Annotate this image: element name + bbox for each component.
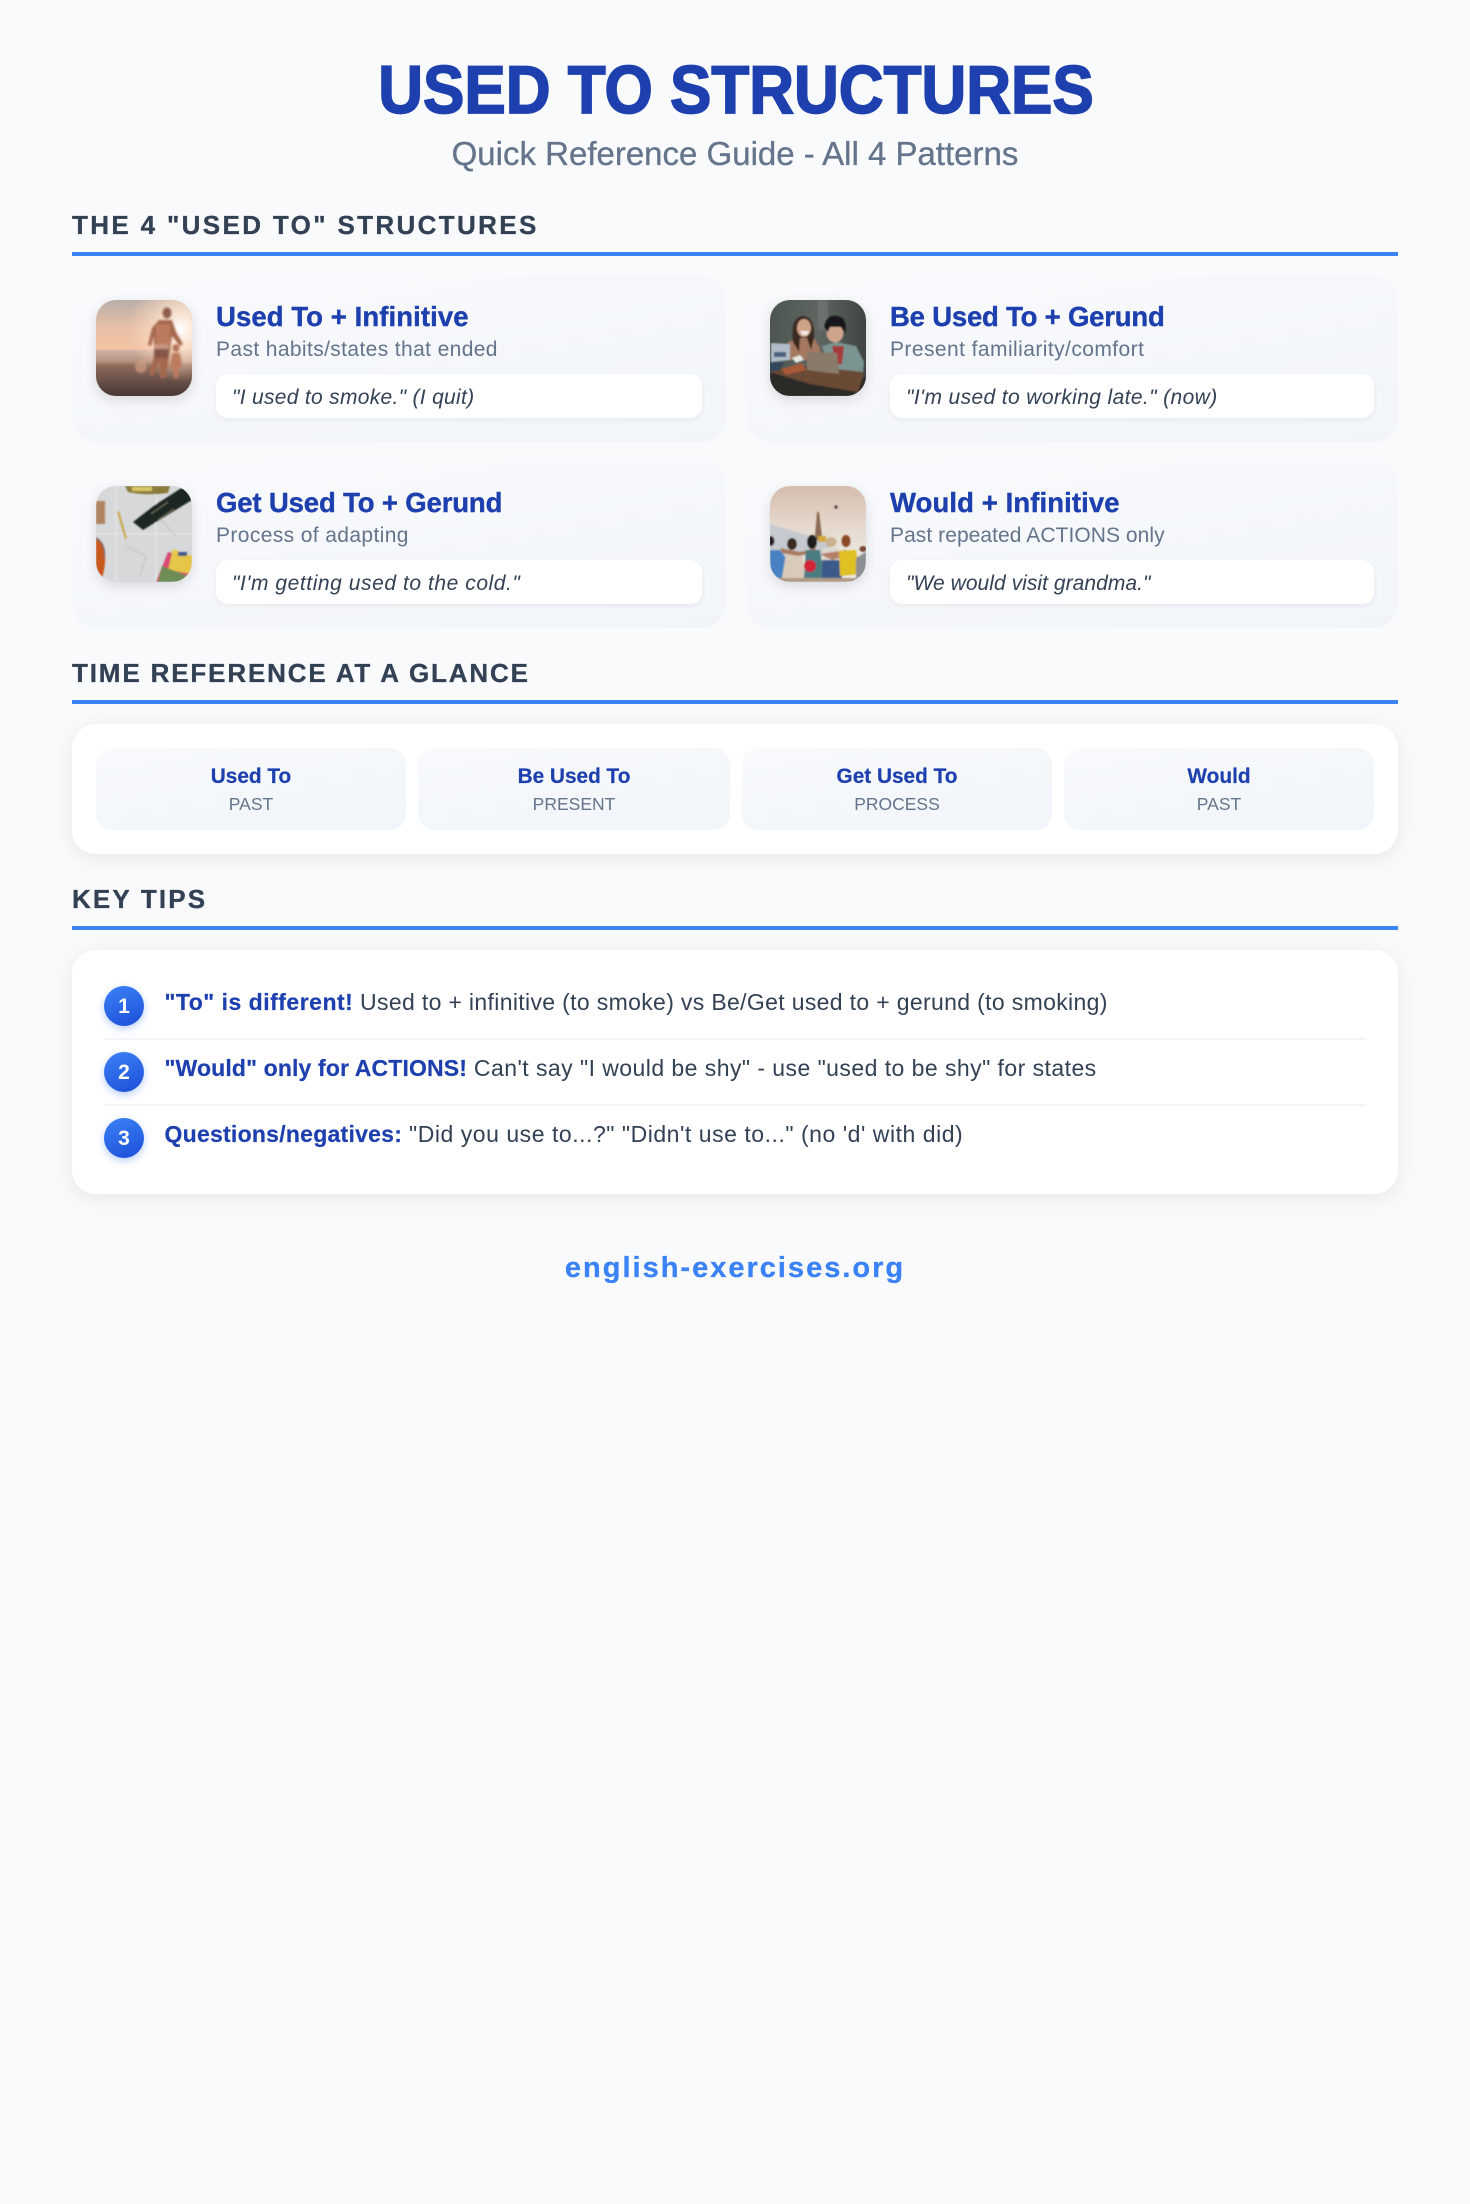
cell label: Get Used To <box>837 765 957 788</box>
subtitle: Quick Reference Guide - All 4 Patterns <box>452 135 1018 172</box>
example sentence <box>890 560 1374 604</box>
cell time: PAST <box>229 794 273 814</box>
cell time: PROCESS <box>854 794 940 814</box>
card description: Past habits/states that ended <box>216 338 498 361</box>
panel: time reference <box>72 724 1398 854</box>
cell label: Used To <box>211 765 291 788</box>
card title: Would + Infinitive <box>890 487 1120 518</box>
icon: photo of father and child on a beach at sunset <box>96 300 192 396</box>
panel: be used to + gerund card <box>746 276 1398 442</box>
panel: used to + infinitive card <box>72 276 726 442</box>
time cell: would <box>1064 748 1374 830</box>
time cell: used to <box>96 748 406 830</box>
cell time: PAST <box>1197 794 1241 814</box>
card title: Get Used To + Gerund <box>216 487 502 518</box>
cell time: PRESENT <box>533 794 615 814</box>
example sentence: "We would visit grandma." <box>906 572 1151 595</box>
tip 1 text: "To" is different! Used to + infinitive (to smoke) vs Be/Get used to + gerund (to smoking) <box>164 989 1108 1015</box>
cell label: Would <box>1187 765 1251 788</box>
tip number 3: 3 <box>118 1127 130 1150</box>
example sentence <box>216 374 702 418</box>
tip number 1: 1 <box>118 995 130 1018</box>
footer site name: english-exercises.org <box>565 1252 905 1284</box>
example sentence: "I'm used to working late." (now) <box>906 386 1218 409</box>
icon: photo of friends sitting with arms around each other <box>770 486 866 582</box>
icon: photo of two people working at laptops <box>770 300 866 396</box>
panel: key tips <box>72 950 1398 1194</box>
card title: Used To + Infinitive <box>216 301 469 332</box>
heading: the 4 structures: THE 4 "USED TO" STRUCTURES <box>72 210 539 240</box>
panel: get used to + gerund card <box>72 462 726 628</box>
tip number 1 <box>104 986 144 1026</box>
example sentence: "I used to smoke." (I quit) <box>232 386 474 409</box>
time cell: be used to <box>418 748 730 830</box>
card title: Be Used To + Gerund <box>890 301 1165 332</box>
example sentence: "I'm getting used to the cold." <box>232 572 520 595</box>
tip number 2: 2 <box>118 1061 130 1084</box>
card description: Past repeated ACTIONS only <box>890 524 1165 547</box>
tip 3 text: Questions/negatives: "Did you use to...?" "Didn't use to..." (no 'd' with did) <box>164 1121 963 1147</box>
cell label: Be Used To <box>518 765 630 788</box>
icon: photo of a map with camera and travel items <box>96 486 192 582</box>
title: USED TO STRUCTURES <box>378 52 1094 128</box>
heading: time reference: TIME REFERENCE AT A GLANCE <box>72 658 530 688</box>
tip number 3 <box>104 1118 144 1158</box>
panel: would + infinitive card <box>746 462 1398 628</box>
tip 2 text: "Would" only for ACTIONS! Can't say "I would be shy" - use "used to be shy" for states <box>164 1055 1097 1081</box>
card description: Present familiarity/comfort <box>890 338 1144 361</box>
time cell: get used to <box>742 748 1052 830</box>
example sentence <box>216 560 702 604</box>
example sentence <box>890 374 1374 418</box>
tip number 2 <box>104 1052 144 1092</box>
card description: Process of adapting <box>216 524 409 547</box>
heading: key tips: KEY TIPS <box>72 884 207 914</box>
